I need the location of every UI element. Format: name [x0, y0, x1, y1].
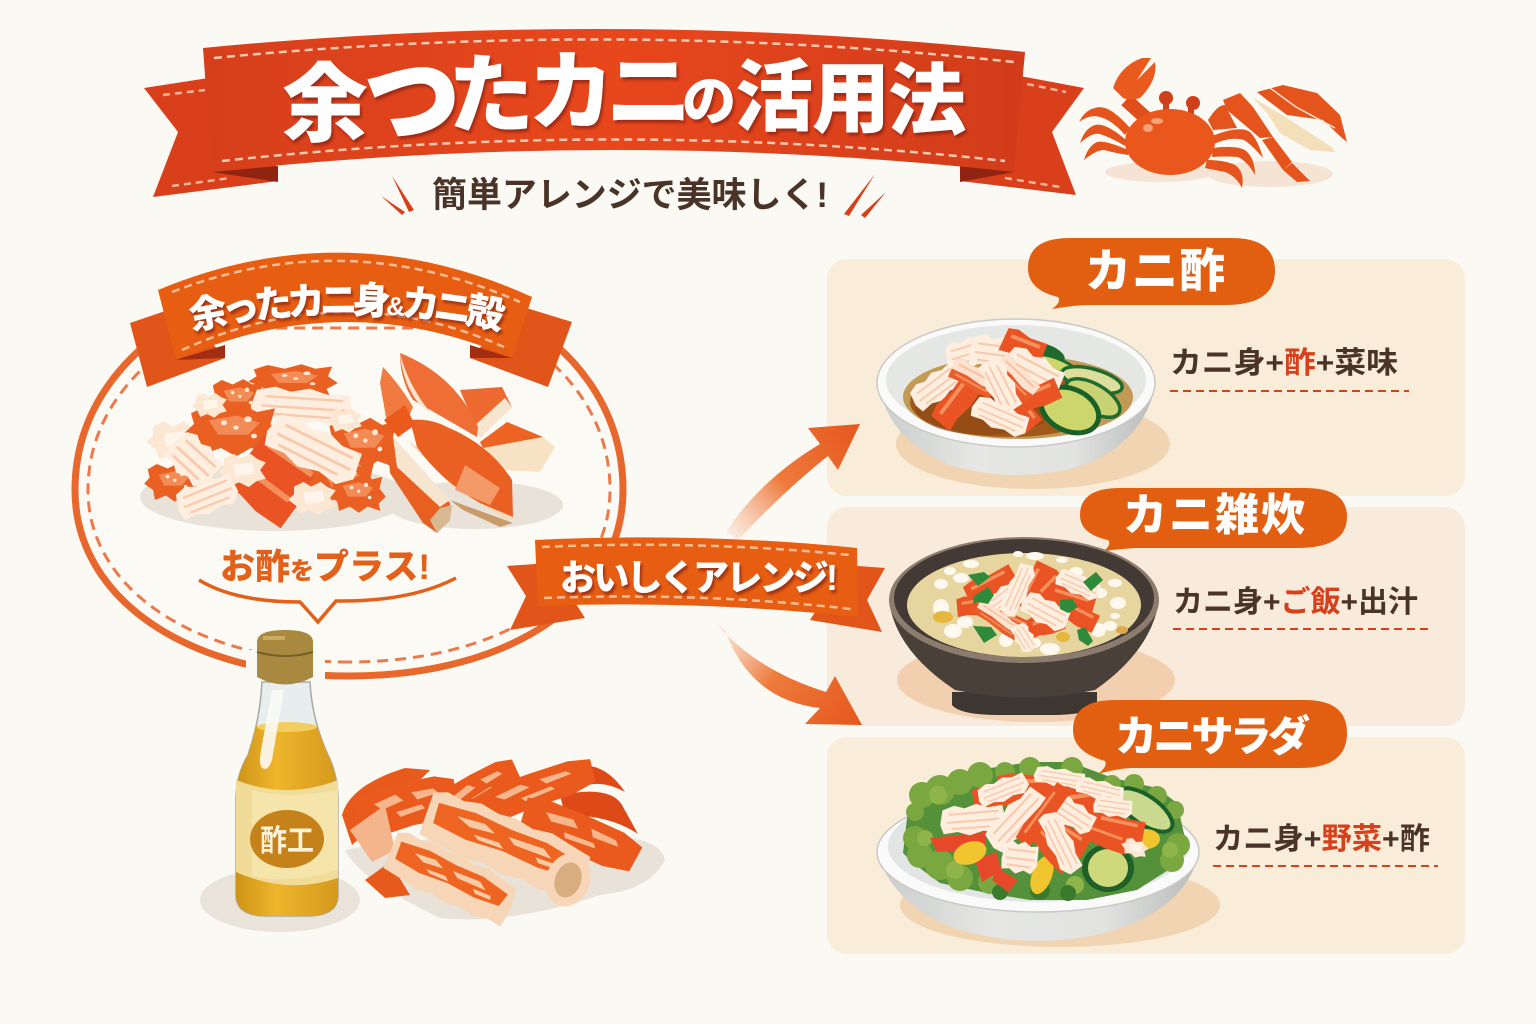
callout: add vinegar: お酢をプラス!: [220, 548, 430, 587]
crab meat pile: [140, 364, 410, 531]
speech bubble: crab salad: カニサラダ: [1115, 713, 1310, 760]
crab body: [1125, 109, 1215, 175]
title text: ニ: [606, 45, 692, 141]
speech bubble: crab porridge: カニ雑炊: [1123, 491, 1305, 540]
title text: の: [682, 72, 736, 132]
title text: 余: [282, 57, 368, 153]
title text: っ: [352, 25, 468, 155]
crab flakes: [905, 325, 1069, 442]
vinegar liquid: [236, 722, 338, 916]
subtitle: 簡単アレンジで美味しく!: [432, 176, 828, 215]
title text: た: [448, 48, 534, 144]
vinegar bottle: [200, 630, 360, 932]
crab shadow: [1105, 161, 1333, 187]
porridge toppings: [933, 559, 1128, 656]
title text: 活: [735, 53, 813, 141]
crab legs pile: [342, 752, 665, 929]
ribbon: leftover crab: [130, 252, 572, 387]
subtitle: [381, 174, 886, 218]
arrow: up to crab vinegar: [726, 424, 860, 540]
panel: crab vinegar: [827, 238, 1465, 496]
panel: left ingredients circle: [72, 252, 626, 680]
lettuce: [903, 757, 1190, 901]
crab legs: [1079, 107, 1263, 188]
crab claws: [380, 353, 563, 533]
crab eyes: [1159, 91, 1200, 118]
banner left tail: [144, 77, 278, 197]
bottle cap: [257, 630, 313, 684]
panel: crab porridge: [827, 488, 1465, 726]
dish: crab porridge bowl: [889, 537, 1175, 722]
arrow: down to crab porridge: [715, 622, 862, 725]
crab left claw: [1113, 58, 1155, 118]
panel: crab salad: [827, 700, 1465, 954]
ribbon: tastily arrange: おいしくアレンジ!: [560, 557, 838, 598]
title text: 法: [888, 57, 966, 145]
ribbon: leftover crab: 余ったカニ身 & カニ殻: [188, 281, 509, 336]
circle frame: [75, 315, 623, 676]
speech bubble: crab vinegar: [1028, 238, 1275, 309]
salad toppings: [930, 764, 1179, 897]
callout: add vinegar: [199, 548, 456, 622]
recipe: crab vinegar: カニ身+酢+菜味: [1170, 347, 1398, 380]
title text: 用: [812, 55, 890, 143]
recipe: crab porridge: カニ身+ご飯+出汁: [1173, 585, 1418, 619]
ribbon: tastily arrange: [507, 537, 885, 632]
title banner: [144, 25, 1084, 197]
dish: crab salad bowl: [877, 757, 1220, 947]
crab big claw: [1208, 85, 1347, 182]
speech bubble: crab porridge: [1080, 488, 1347, 551]
dish: crab vinegar bowl: [877, 319, 1170, 489]
bottle label: [236, 780, 338, 885]
speech bubble: crab salad: [1073, 700, 1347, 774]
crab illustration: [1079, 58, 1347, 188]
banner main: [203, 29, 1025, 172]
cucumbers: [1032, 340, 1126, 442]
vinegar bottle: 酢工: [260, 825, 314, 858]
title text: カ: [528, 45, 614, 141]
recipe: crab salad: カニ身+野菜+酢: [1213, 823, 1430, 856]
banner right tail: [960, 75, 1084, 195]
speech bubble: crab vinegar: カニ酢: [1085, 245, 1225, 297]
rice grains: [933, 551, 1126, 655]
